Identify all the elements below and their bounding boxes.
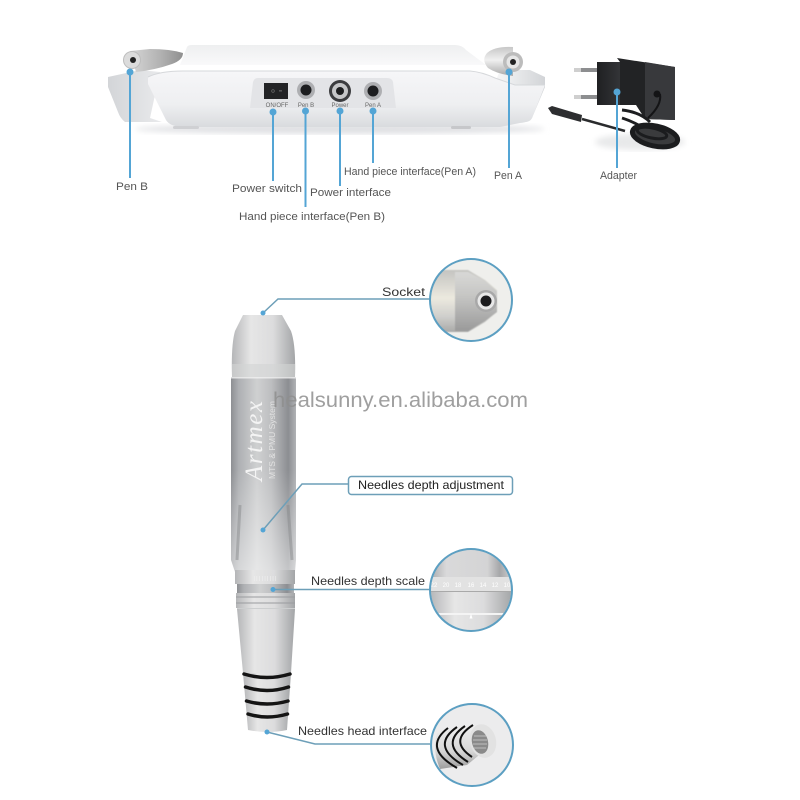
inset: socket [430,259,512,341]
inset: needles depth scale: 18 [455,583,462,589]
inset: needles head interface [431,704,513,786]
inset: needles depth scale: 16 [468,583,475,589]
pen: | | | | | | | | | [254,576,276,582]
pen barrel [231,377,296,572]
port: pen B [297,81,315,99]
adapter [548,58,685,151]
device labels: Power switch [232,183,302,195]
callout lines: device [126,68,620,207]
pen B in cradle [124,49,183,72]
callout: needles depth adjustment: Needles depth adjustment [358,478,505,492]
pen cap [232,315,295,377]
port: pen A [364,82,382,100]
inset: needles depth scale [430,549,512,631]
callout: needles head interface [264,724,430,744]
inset: needles depth scale: 20 [443,583,450,589]
port: power [329,80,351,102]
pen [231,315,296,732]
device labels: Power interface [310,187,391,199]
port labels: Pen B [298,103,314,109]
pen A in cradle [484,47,523,76]
pen taper [237,609,295,673]
port labels: Pen A [365,103,381,109]
o-rings [244,674,290,717]
inset: needles depth scale: 12 [492,583,499,589]
pen branding: MTS & PMU System [267,401,277,479]
callout: socket [260,285,430,316]
callout: needles head interface: Needles head interface [298,724,427,738]
inset: needles depth scale: 22 [431,583,438,589]
pen branding: Artmex [241,401,268,483]
callout: needles depth scale: Needles depth scale [311,574,425,588]
watermark: healsunny.en.alibaba.com [273,389,528,412]
device labels: Hand piece interface(Pen B) [239,211,385,223]
device labels: Pen B [116,181,148,193]
feet [173,126,199,129]
infographic canvas [108,45,684,787]
port labels: Power [331,103,349,109]
device labels [116,166,637,223]
callout: needles depth scale [270,574,430,592]
callout: socket: Socket [382,285,426,299]
port labels: ON/OFF [266,103,289,109]
inset: needles depth scale: 14 [480,583,487,589]
depth scale section [235,570,295,584]
device illustration [108,45,545,134]
device labels: Pen A [494,170,523,182]
device labels: Hand piece interface(Pen A) [344,166,476,178]
device labels: Adapter [600,170,637,182]
port labels [266,103,381,109]
callout: needles depth adjustment [260,476,512,532]
inset: needles depth scale: 10 [504,583,511,589]
connector panel [250,78,396,108]
power switch [264,83,288,99]
